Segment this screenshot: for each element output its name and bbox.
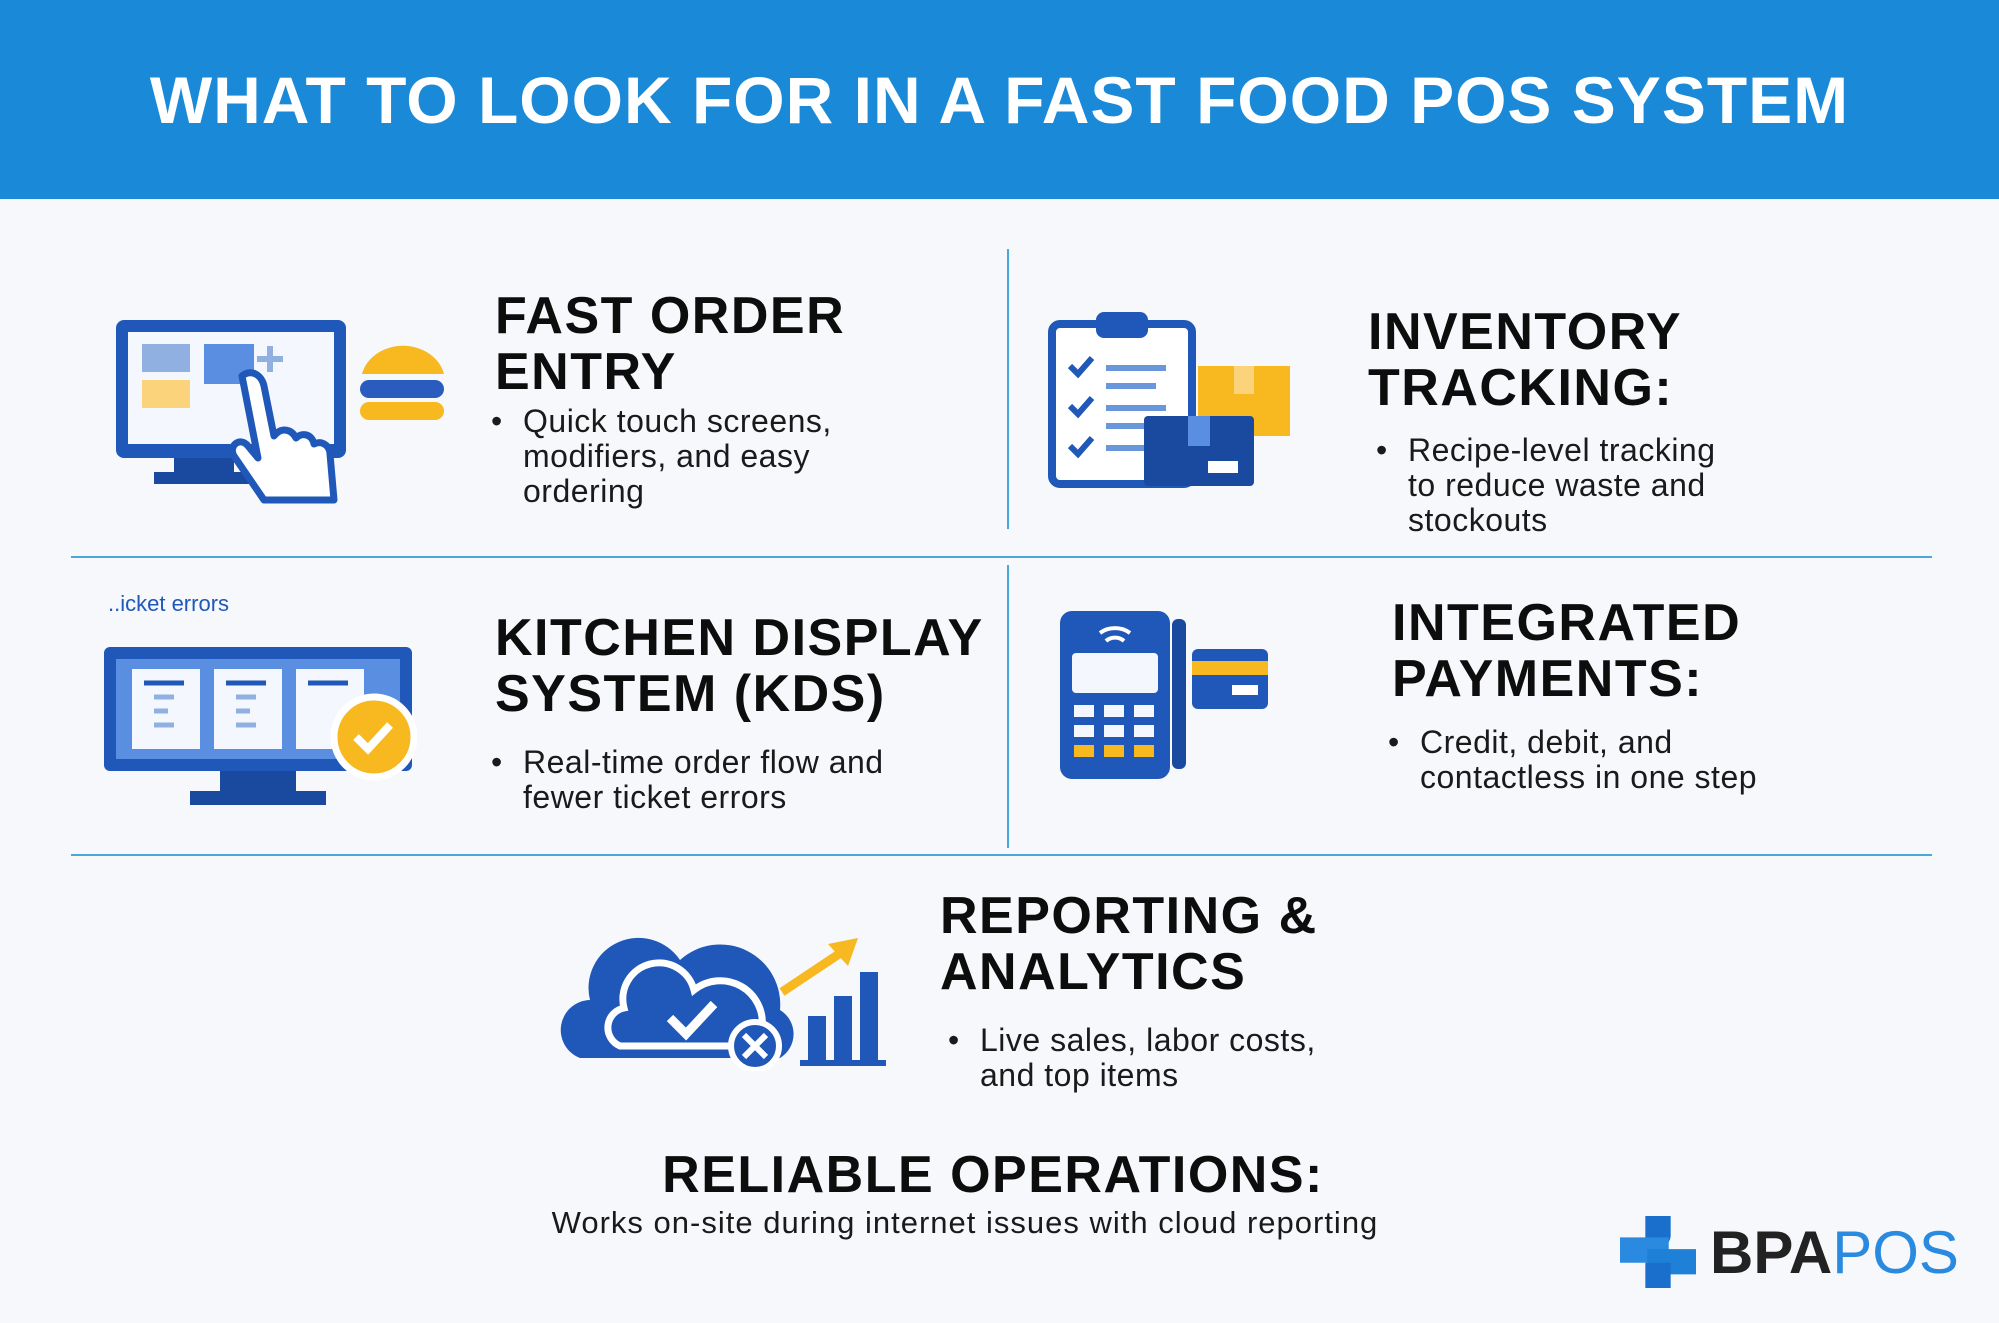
bullet text: Quick touch screens, (523, 403, 832, 439)
bullet text (1377, 432, 1716, 538)
reliable operations block (552, 1146, 1378, 1240)
bullet text: Live sales, labor costs, (980, 1022, 1316, 1058)
heading: PAYMENTS: (1392, 650, 1703, 708)
panel: reporting and analytics (560, 887, 1318, 1093)
heading: INTEGRATED (1392, 594, 1741, 652)
bullet text: Credit, debit, and (1420, 724, 1673, 760)
panel: integrated payments (1060, 594, 1757, 795)
heading: KITCHEN DISPLAY (495, 609, 984, 667)
icon: clipboard and boxes (1048, 312, 1290, 488)
icon: card terminal (1060, 611, 1268, 779)
panel: fast order entry (116, 287, 845, 509)
heading: FAST ORDER (495, 287, 845, 345)
title: WHAT TO LOOK FOR IN A FAST FOOD POS SYSTEM (150, 63, 1849, 137)
bullet text: contactless in one step (1420, 759, 1757, 795)
wordmark: BPAPOS (1710, 1219, 1959, 1286)
heading (1392, 594, 1741, 708)
heading: ENTRY (495, 343, 677, 401)
logo: BPA POS (1620, 1216, 1959, 1288)
heading (940, 887, 1318, 1001)
icon: KDS monitor (104, 647, 417, 805)
bullet text: Recipe-level tracking (1408, 432, 1716, 468)
icon: touch monitor with burger (116, 320, 444, 504)
bullet text: ordering (523, 473, 644, 509)
divider lines (1007, 249, 1009, 529)
bullet text (492, 403, 832, 509)
heading: ANALYTICS (940, 943, 1246, 1001)
heading (1368, 303, 1682, 417)
caption fragment: ..icket errors (108, 591, 229, 616)
heading: RELIABLE OPERATIONS: (662, 1146, 1324, 1204)
subtext: Works on-site during internet issues with cloud reporting (552, 1205, 1378, 1240)
heading: INVENTORY (1368, 303, 1682, 361)
panel: kitchen display system (104, 591, 984, 815)
bullet text (1389, 724, 1757, 795)
panel: inventory tracking (1048, 303, 1716, 538)
heading: REPORTING & (940, 887, 1318, 945)
bullet text: to reduce waste and (1408, 467, 1706, 503)
header banner (0, 0, 1999, 199)
bullet text: stockouts (1408, 502, 1548, 538)
heading: SYSTEM (KDS) (495, 665, 886, 723)
bullet text (949, 1022, 1316, 1093)
bullet text: modifiers, and easy (523, 438, 810, 474)
heading: TRACKING: (1368, 359, 1673, 417)
icon: cross (1620, 1216, 1696, 1288)
bullet text: Real-time order flow and (523, 744, 884, 780)
bullet text: and top items (980, 1057, 1179, 1093)
heading (495, 287, 845, 401)
icon: cloud with chart (560, 938, 886, 1071)
heading (495, 609, 984, 723)
bullet text: fewer ticket errors (523, 779, 787, 815)
bullet text (492, 744, 884, 815)
